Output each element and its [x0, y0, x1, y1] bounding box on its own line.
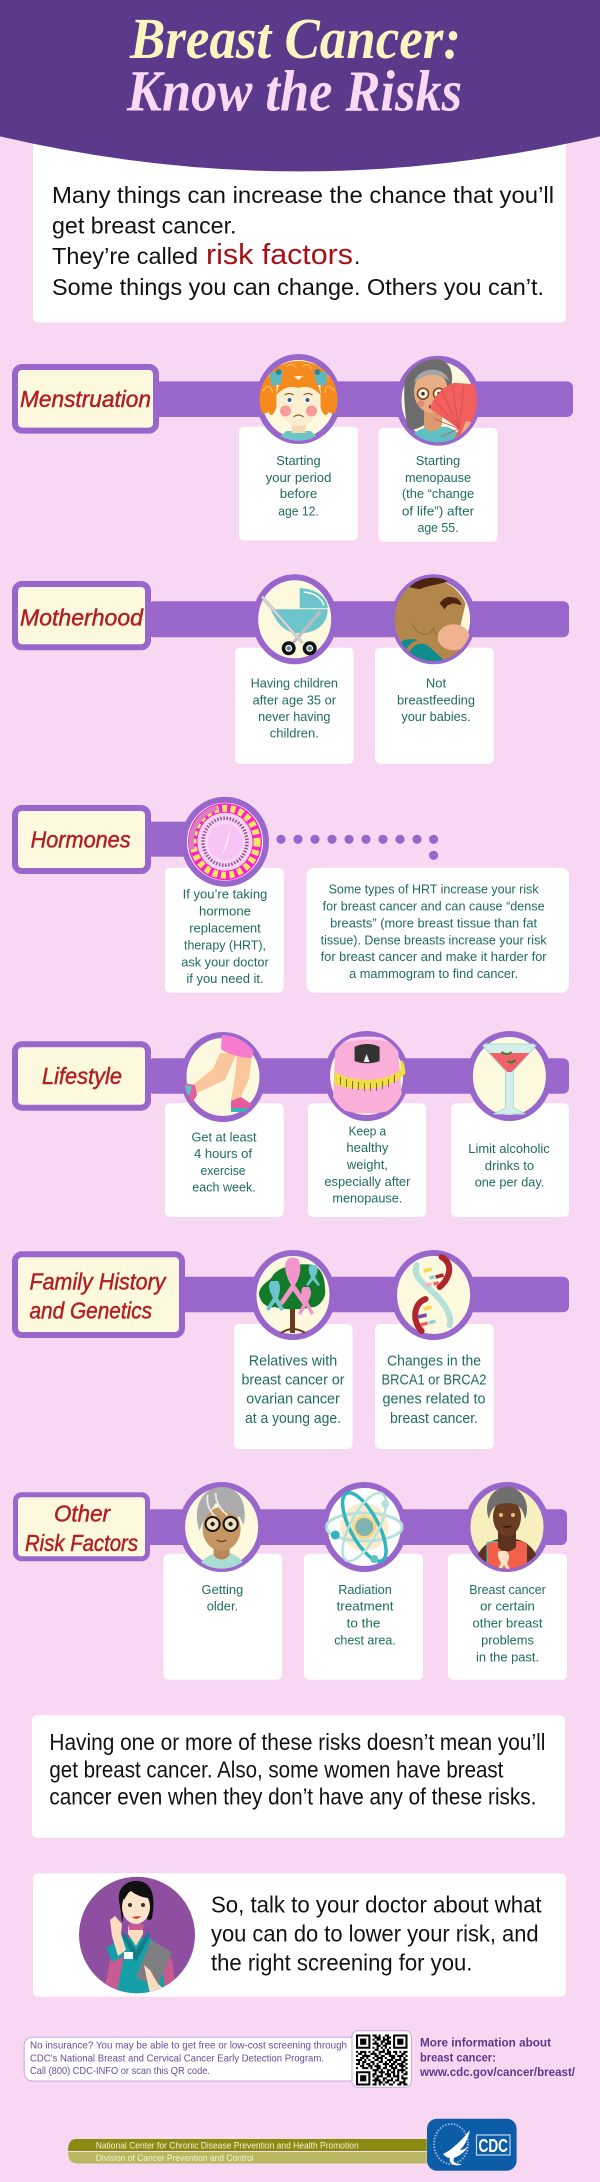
card: having children: after age 35 or [253, 692, 337, 707]
label: Menstruation [15, 367, 156, 431]
card: limit alcohol: Limit alcoholic [468, 1141, 550, 1156]
icon: DNA helix [394, 1253, 473, 1337]
card: past breast cancer: or certain [480, 1599, 535, 1614]
intro text box: They’re called [52, 243, 198, 269]
label: Lifestyle: Lifestyle [42, 1063, 122, 1089]
card: BRCA genes: breast cancer. [390, 1411, 478, 1427]
card: getting older [163, 1554, 282, 1680]
card: menopause after 55: age 55. [418, 520, 458, 535]
card: exercise: exercise [200, 1163, 246, 1178]
card: BRCA genes: BRCA1 or BRCA2 [382, 1373, 486, 1389]
insurance note: CDC's National Breast and Cervical Cancer Early Detection Program. [30, 2052, 324, 2064]
card: healthy weight: weight, [346, 1157, 388, 1172]
card: radiation: treatment [336, 1599, 394, 1614]
label: Menstruation: Menstruation [20, 386, 151, 412]
card: taking HRT: replacement [189, 920, 261, 935]
reassurance text box [32, 1715, 565, 1838]
icon: older woman [182, 1485, 261, 1569]
card: taking HRT: ask your doctor [181, 954, 269, 969]
icon: running legs [183, 1033, 262, 1119]
card: taking HRT: If you’re taking [183, 887, 267, 902]
card: radiation: chest area. [334, 1633, 396, 1648]
card: not breastfeeding: Not [426, 675, 447, 690]
card: dense breasts: breasts” (more breast tissue than fat [330, 915, 537, 930]
card: menopause after 55: (the “change [402, 486, 474, 501]
card: radiation [304, 1554, 423, 1680]
icon: scale and tape measure [327, 1034, 407, 1118]
icon: birth control pill pack [184, 800, 266, 884]
header banner with title: Breast Cancer: [129, 6, 461, 71]
card: exercise: each week. [192, 1180, 256, 1195]
CDC logo [427, 2119, 517, 2171]
insurance note: No insurance? You may be able to get free or low-cost screening through [30, 2040, 347, 2052]
talk to your doctor box: the right screening for you. [211, 1950, 472, 1976]
card: dense breasts: a mammogram to find cancer. [349, 966, 518, 981]
card: past breast cancer: Breast cancer [469, 1582, 546, 1597]
label: Family History and Genetics: and Genetics [30, 1297, 152, 1323]
header banner with title: Know the Risks [126, 59, 462, 124]
more information link [419, 2036, 576, 2079]
footer band [68, 2139, 427, 2164]
card: not breastfeeding: your babies. [401, 709, 471, 724]
intro text box: get breast cancer. [52, 213, 236, 239]
card: having children: Having children [251, 675, 338, 690]
icon: ribbon tree [254, 1253, 332, 1337]
card: getting older: Getting [202, 1582, 243, 1597]
label: Other Risk Factors: Risk Factors [25, 1530, 138, 1556]
section: Lifestyle [15, 1033, 569, 1217]
card: dense breasts: tissue). Dense breasts increase your risk [321, 932, 547, 947]
reassurance text box: Having one or more of these risks doesn’t mean you’ll [49, 1729, 545, 1755]
card: radiation: Radiation [338, 1582, 392, 1597]
card: relatives: ovarian cancer [246, 1392, 340, 1408]
card: dense breasts: for breast cancer and make it harder for [321, 949, 547, 964]
card: period before 12 [239, 427, 358, 540]
card: menopause after 55: Starting [416, 453, 460, 468]
intro text box: risk factors [206, 239, 353, 271]
card: relatives: breast cancer or [242, 1373, 345, 1389]
card: menopause after 55: menopause [405, 470, 471, 485]
QR code [352, 2031, 411, 2087]
card: exercise [165, 1103, 284, 1217]
card: healthy weight: healthy [346, 1140, 389, 1155]
intro text box: Some things you can change. Others you can’t. [52, 274, 544, 300]
label: Hormones [15, 808, 148, 871]
card: exercise: 4 hours of [194, 1146, 252, 1161]
header banner with title [0, 0, 600, 171]
label: Other Risk Factors: Other [54, 1501, 111, 1527]
label: Lifestyle [15, 1044, 148, 1108]
card: healthy weight: especially after [324, 1174, 411, 1189]
card: dense breasts: Some types of HRT increase your risk [329, 882, 539, 897]
card: period before 12: before [280, 486, 317, 501]
label: Hormones: Hormones [31, 827, 131, 853]
insurance note [24, 2037, 364, 2081]
card: relatives: Relatives with [249, 1354, 337, 1370]
CDC logo: CDC [478, 2136, 508, 2156]
card: past breast cancer: other breast [472, 1616, 543, 1631]
reassurance text box: get breast cancer. Also, some women have breast [49, 1756, 504, 1782]
icon: atom [325, 1485, 404, 1569]
card: relatives [234, 1324, 352, 1449]
card: menopause after 55 [378, 428, 498, 542]
card: taking HRT: therapy (HRT), [184, 937, 266, 952]
card: period before 12: your period [266, 470, 331, 485]
label: Motherhood [15, 584, 148, 647]
intro text box: . [354, 243, 360, 269]
card: BRCA genes: genes related to [382, 1392, 486, 1408]
card: relatives: at a young age. [245, 1411, 341, 1427]
label: Family History and Genetics: Family History [30, 1268, 167, 1294]
section: Menstruation [15, 357, 573, 542]
section: Other Risk Factors [16, 1485, 567, 1680]
card: exercise: Get at least [192, 1129, 257, 1144]
talk to your doctor box [33, 1873, 566, 1997]
card: past breast cancer: in the past. [476, 1649, 539, 1664]
card: healthy weight: Keep a [349, 1123, 387, 1138]
card: not breastfeeding [375, 648, 494, 764]
section: Motherhood [15, 577, 569, 764]
icon: breastfeeding mother [392, 577, 473, 663]
card: limit alcohol [451, 1103, 569, 1217]
card: healthy weight [308, 1103, 426, 1217]
card: radiation: to the [347, 1616, 380, 1631]
card: BRCA genes [375, 1324, 494, 1449]
intro text box: Many things can increase the chance that you’ll [52, 182, 554, 208]
card: not breastfeeding: breastfeeding [397, 692, 475, 707]
card: limit alcohol: drinks to [485, 1158, 534, 1173]
section: Hormones [15, 800, 569, 993]
intro text box [33, 125, 566, 322]
label: Other Risk Factors [16, 1495, 148, 1559]
card: having children [235, 648, 354, 764]
footer band: National Center for Chronic Disease Prevention and Health Promotion [96, 2140, 359, 2152]
icon: martini [470, 1034, 549, 1118]
card: taking HRT: if you need it. [186, 971, 264, 986]
reassurance text box: cancer even when they don’t have any of these risks. [49, 1784, 536, 1810]
card: past breast cancer [448, 1554, 567, 1680]
card: BRCA genes: Changes in the [387, 1354, 481, 1370]
card: limit alcohol: one per day. [475, 1175, 544, 1190]
card: having children: children. [270, 726, 319, 741]
more information link: More information about [420, 2036, 551, 2050]
talk to your doctor box: So, talk to your doctor about what [211, 1892, 542, 1918]
icon: woman with ribbon [468, 1485, 546, 1572]
card: past breast cancer: problems [481, 1633, 534, 1648]
card: dense breasts: for breast cancer and can cause “dense [323, 899, 545, 914]
icon: doctor [79, 1877, 195, 1996]
card: having children: never having [258, 709, 330, 724]
footer band: Division of Cancer Prevention and Control [96, 2153, 254, 2164]
card: menopause after 55: of life”) after [402, 503, 475, 518]
dotted connector [276, 835, 438, 860]
more information link: www.cdc.gov/cancer/breast/ [419, 2065, 576, 2079]
talk to your doctor box: you can do to lower your risk, and [211, 1921, 539, 1947]
card: healthy weight: menopause. [332, 1191, 402, 1206]
card: dense breasts [306, 868, 569, 993]
more information link: breast cancer: [420, 2051, 496, 2065]
icon: woman with fan [398, 358, 482, 445]
icon: stroller [255, 577, 334, 661]
card: taking HRT: hormone [199, 904, 251, 919]
card: getting older: older. [207, 1599, 238, 1614]
insurance note: Call (800) CDC-INFO or scan this QR code. [30, 2065, 210, 2077]
section: Family History and Genetics [15, 1253, 569, 1449]
card: period before 12: age 12. [278, 503, 319, 518]
label: Motherhood: Motherhood [20, 604, 144, 630]
card: period before 12: Starting [276, 453, 321, 468]
icon: girl with orange hair [259, 357, 338, 443]
card: taking HRT [165, 868, 284, 993]
label: Family History and Genetics [15, 1254, 182, 1335]
